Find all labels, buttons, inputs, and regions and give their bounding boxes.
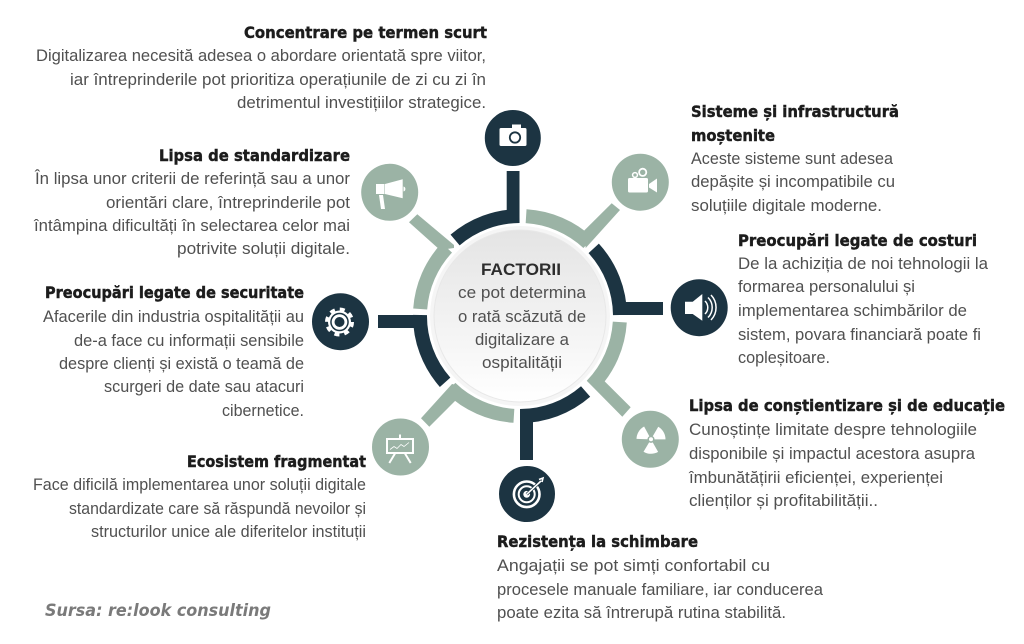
text block: Preocupări legate de securitate (43, 283, 304, 420)
text block: Preocupări legate de costuri: sistem, povara financiară poate fi (738, 326, 981, 344)
text block: Rezistența la schimbare: procesele manuale familiare, iar conducerea (497, 581, 824, 599)
text block: Ecosistem fragmentat: Ecosistem fragmentat (187, 452, 366, 471)
text block: Preocupări legate de securitate: Preocupări legate de securitate (45, 283, 304, 302)
icon: gear (312, 293, 369, 350)
text block: Rezistența la schimbare: Rezistența la schimbare (497, 532, 698, 551)
text block: Ecosistem fragmentat: structurilor unice ale diferitelor instituții (91, 523, 366, 541)
text block: Ecosistem fragmentat: standardizate care să răspundă nevoilor și (69, 500, 366, 518)
text block: Concentrare pe termen scurt: iar întreprinderile pot prioritiza operațiunile de zi cu zi în (70, 71, 486, 89)
text block: Sisteme și infrastructură moștenite: Aceste sisteme sunt adesea (691, 150, 894, 168)
text block: Preocupări legate de securitate: despre clienți și există o teamă de (59, 355, 304, 373)
text block: Ecosistem fragmentat: Face dificilă implementarea unor soluții digitale (33, 476, 366, 494)
icon: camera (484, 110, 541, 166)
text block: Sisteme și infrastructură moștenite: moștenite (691, 126, 775, 145)
central text (458, 260, 587, 372)
text block: Concentrare pe termen scurt: Digitalizarea necesită adesea o abordare orientată spre viitor, (36, 47, 486, 65)
text block: Sisteme și infrastructură moștenite: depășite și incompatibile cu (691, 173, 895, 191)
text block: Sisteme și infrastructură moștenite: Sisteme și infrastructură (691, 102, 899, 121)
ring segment and spoke: top (455, 171, 520, 240)
source note: Sursa: re:look consulting (45, 601, 271, 620)
text block: Preocupări legate de costuri: Preocupări legate de costuri (738, 231, 977, 250)
text block: Preocupări legate de costuri: copleșitoare. (738, 349, 830, 367)
ring segment and spoke: upper right (526, 203, 620, 248)
icon: radiation (622, 411, 679, 468)
text block: Lipsa de conștientizare și de educație (688, 396, 1005, 510)
central text: o rată scăzută de (458, 307, 586, 326)
text block: Sisteme și infrastructură moștenite: soluțiile digitale moderne. (691, 197, 882, 215)
text block: Lipsa de standardizare: potrivite soluții digitale. (177, 240, 350, 258)
text block: Preocupări legate de securitate: cibernetice. (222, 402, 304, 420)
text block: Sisteme și infrastructură moștenite (691, 102, 899, 215)
text block: Preocupări legate de costuri: De la achiziția de noi tehnologii la (738, 255, 989, 273)
ring segment and spoke: lower left (421, 384, 514, 427)
icon: megaphone (361, 164, 418, 221)
text block: Lipsa de conștientizare și de educație: disponibile și impactul acestora asupra (689, 445, 976, 463)
text block: Lipsa de standardizare (33, 146, 351, 258)
text block: Preocupări legate de securitate: scurgeri de date sau atacuri (104, 378, 304, 396)
text block: Concentrare pe termen scurt: Concentrare pe termen scurt (244, 23, 487, 42)
central disc (430, 226, 610, 406)
panel: central ring with spokes (378, 171, 663, 460)
text block: Lipsa de conștientizare și de educație: clienților și profitabilității.. (689, 492, 878, 510)
text block: Lipsa de standardizare: În lipsa unor criterii de referință sau a unor (34, 169, 351, 188)
text block: Preocupări legate de securitate: de-a face cu informații sensibile (74, 332, 304, 350)
text block: Ecosistem fragmentat (33, 452, 366, 541)
ring segment and spoke: bottom (520, 392, 586, 460)
central text: ospitalității (482, 353, 562, 372)
text block: Lipsa de standardizare: Lipsa de standardizare (159, 146, 350, 165)
ring segment and spoke: right (594, 248, 663, 315)
icon: presentation board (372, 418, 429, 476)
text block: Concentrare pe termen scurt (36, 23, 487, 112)
ring segment and spoke: upper left (409, 214, 454, 309)
text block: Preocupări legate de costuri (738, 231, 989, 367)
icon: target (498, 466, 556, 522)
text block: Rezistența la schimbare: Angajații se pot simți confortabil cu (497, 557, 770, 575)
central text: ce pot determina (458, 283, 587, 302)
text block: Lipsa de conștientizare și de educație: îmbunătățirii eficienței, experienței (688, 469, 943, 487)
icon: speaker (671, 279, 728, 336)
text block: Rezistența la schimbare: poate ezita să întrerupă rutina stabilită. (497, 604, 786, 622)
text block: Concentrare pe termen scurt: detrimentul investițiilor strategice. (237, 94, 486, 112)
ring segment and spoke: lower right (587, 322, 631, 417)
text block: Rezistența la schimbare (497, 532, 824, 622)
central text: FACTORII (481, 260, 561, 279)
ring segment and spoke: left (378, 315, 445, 382)
text block: Lipsa de standardizare: întâmpina dificultăți în selectarea celor mai (33, 217, 350, 235)
text block: Lipsa de conștientizare și de educație: Cunoștințe limitate despre tehnologiile (689, 421, 977, 439)
text block: Preocupări legate de costuri: formarea personalului și (738, 278, 915, 296)
icon: video camera (612, 154, 669, 211)
text block: Lipsa de conștientizare și de educație: Lipsa de conștientizare și de educație (689, 396, 1005, 415)
central text: digitalizare a (475, 330, 570, 349)
text block: Preocupări legate de securitate: Afacerile din industria ospitalității au (43, 308, 304, 326)
text block: Preocupări legate de costuri: implementarea schimbărilor de (738, 302, 967, 320)
text block: Lipsa de standardizare: orientări clare, întreprinderile pot (106, 194, 350, 212)
